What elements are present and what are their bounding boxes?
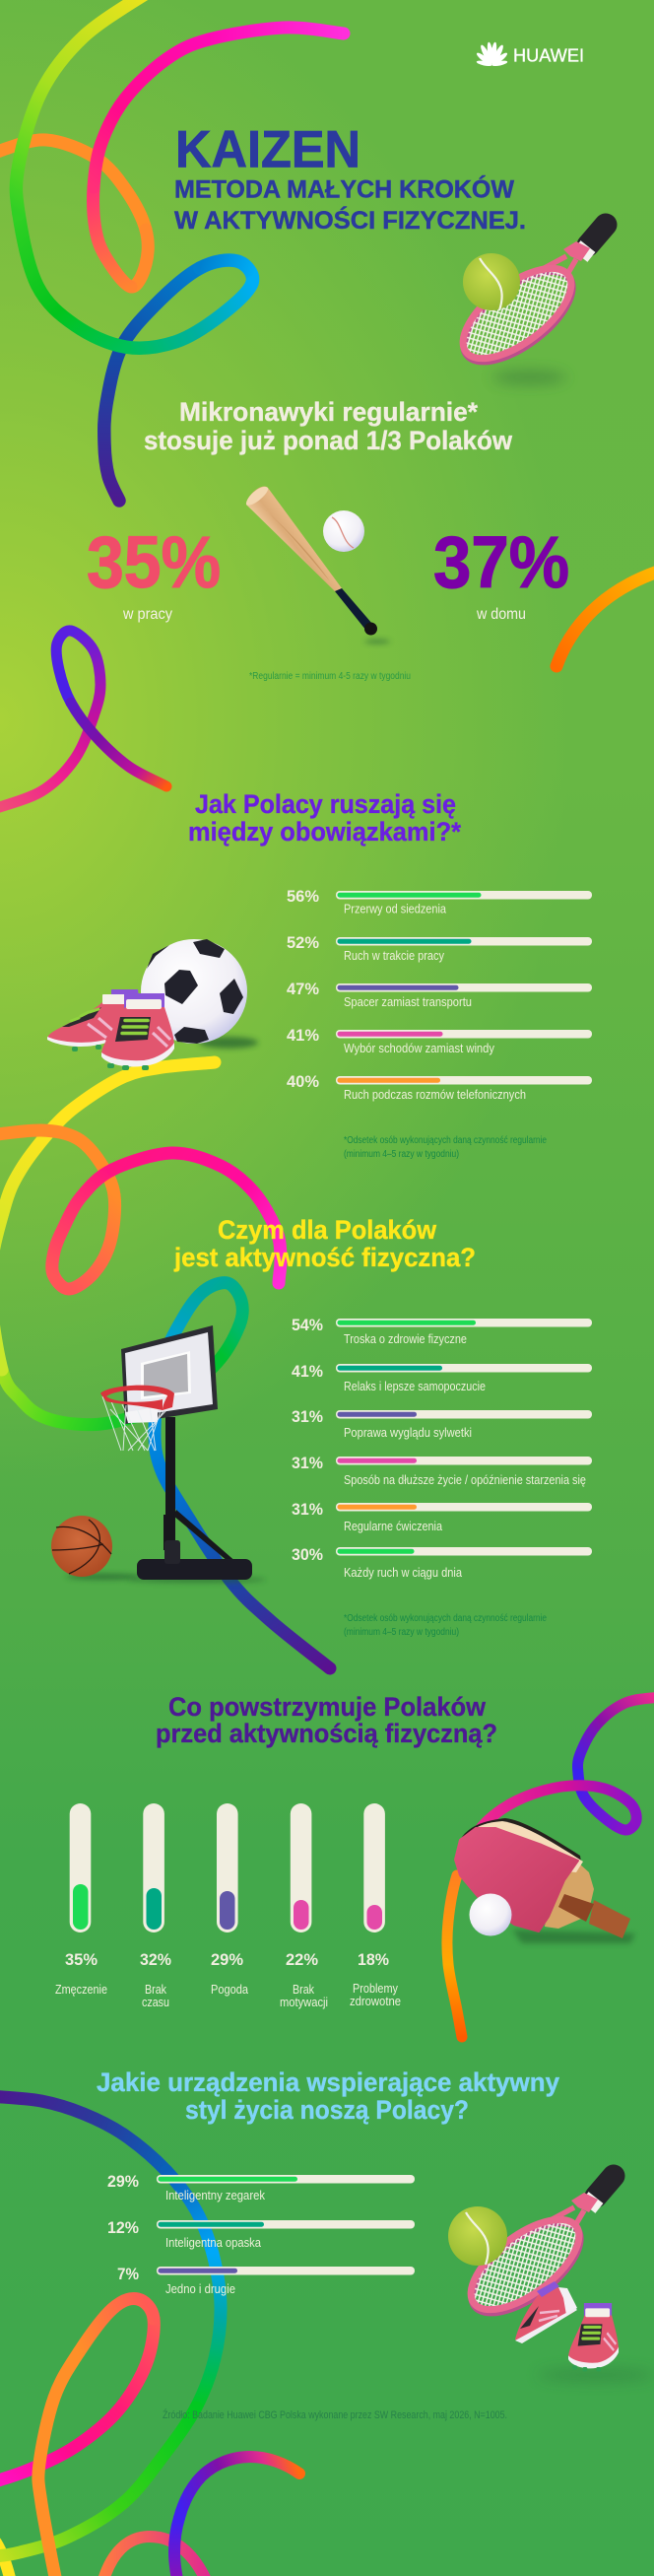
heading: devices: Jakie urządzenia wspierające aktywny <box>97 2068 559 2097</box>
row: 31 percent body shape: Poprawa wyglądu sylwetki <box>344 1426 472 1440</box>
row: 56 percent: 56% <box>287 888 319 906</box>
stat: 35 percent at work: w pracy <box>122 606 172 623</box>
chart: activity between duties <box>287 888 592 1102</box>
column: lack of time: Brak <box>145 1983 167 1997</box>
ribbon: top orange and magenta <box>0 28 344 287</box>
row: 31 percent longevity: 31% <box>292 1455 323 1472</box>
row: 12 percent: 12% <box>107 2219 139 2237</box>
footnote: share of respondents second: (minimum 4–5 razy w tygodniu) <box>344 1627 459 1638</box>
footnote: share of respondents: *Odsetek osób wykonujących daną czynność regularnie <box>344 1135 547 1146</box>
row: 54 percent <box>292 1317 592 1346</box>
title: KAIZEN <box>175 120 360 179</box>
column: fatigue <box>55 1803 107 1997</box>
column: health problems: Problemy <box>353 1982 399 1996</box>
heading: micro-habits: stosuje już ponad 1/3 Polaków <box>144 426 513 455</box>
footnote: share of respondents: (minimum 4–5 razy w tygodniu) <box>344 1149 459 1160</box>
row: 30 percent <box>292 1546 592 1580</box>
row: 41 percent: Relaks i lepsze samopoczucie <box>344 1380 486 1393</box>
icon: Huawei petals <box>476 41 508 67</box>
row: 31 percent exercise: 31% <box>292 1501 323 1519</box>
heading: devices: styl życia noszą Polacy? <box>185 2095 469 2125</box>
stat: 35 percent at work: 35% <box>87 521 221 603</box>
row: 40 percent <box>287 1073 592 1102</box>
ribbon: middle yellow, green and blue <box>0 1062 330 1668</box>
column: lack of time: 32% <box>140 1951 171 1969</box>
stat: 37 percent at home: w domu <box>476 606 526 623</box>
row: 52 percent <box>287 934 592 963</box>
row: 41 percent: 41% <box>292 1363 323 1381</box>
icon: tennis racket, ball and boots <box>448 2176 654 2382</box>
icon: baseball bat and ball <box>246 487 390 644</box>
title <box>174 120 526 235</box>
row: 7 percent <box>117 2266 415 2296</box>
column: lack of motivation <box>280 1803 328 2009</box>
row: 41 percent <box>292 1363 592 1393</box>
heading: what activity means: jest aktywność fizyczna? <box>173 1243 476 1272</box>
ribbon: right of paddle <box>447 1697 654 2037</box>
heading: what activity means: Czym dla Polaków <box>218 1215 437 1245</box>
title: W AKTYWNOŚCI FIZYCZNEJ. <box>174 205 526 235</box>
stat: 37 percent at home: 37% <box>433 521 569 603</box>
row: 41 percent <box>287 1027 592 1055</box>
icon: table tennis paddle and ball <box>455 1818 635 1943</box>
column: lack of motivation: motywacji <box>280 1996 328 2009</box>
column: weather: 29% <box>211 1951 243 1969</box>
heading: devices <box>97 2068 559 2125</box>
column: health problems <box>350 1803 401 2008</box>
row: 29 percent: Inteligentny zegarek <box>165 2189 266 2203</box>
row: 56 percent: Przerwy od siedzenia <box>344 903 446 916</box>
column: weather <box>211 1803 248 1997</box>
row: 31 percent exercise: Regularne ćwiczenia <box>344 1520 442 1533</box>
chart: devices <box>107 2173 415 2296</box>
row: 40 percent: 40% <box>287 1073 319 1091</box>
icon: soccer ball and boots <box>47 939 258 1070</box>
row: 54 percent: Troska o zdrowie fizyczne <box>344 1332 467 1346</box>
row: 7 percent: 7% <box>117 2266 139 2283</box>
row: 47 percent: 47% <box>287 981 319 998</box>
row: 30 percent: 30% <box>292 1546 323 1564</box>
ribbon: middle orange and magenta <box>0 1130 281 1289</box>
row: 12 percent: Inteligentna opaska <box>165 2236 261 2250</box>
row: 31 percent body shape: 31% <box>292 1408 323 1426</box>
column: lack of motivation: Brak <box>293 1983 315 1997</box>
row: 31 percent body shape <box>292 1408 592 1440</box>
row: 52 percent: Ruch w trakcie pracy <box>344 949 445 963</box>
column: health problems: 18% <box>358 1951 389 1969</box>
ribbon: right orange arc <box>556 572 654 666</box>
heading: what holds Poles back: Co powstrzymuje Polaków <box>168 1692 487 1722</box>
row: 31 percent longevity: Sposób na dłuższe życie / opóźnienie starzenia się <box>344 1473 586 1487</box>
row: 41 percent: Wybór schodów zamiast windy <box>344 1042 495 1055</box>
chart: barriers <box>55 1803 401 2009</box>
row: 56 percent <box>287 888 592 916</box>
column: weather: Pogoda <box>211 1983 248 1997</box>
column: lack of motivation: 22% <box>286 1951 318 1969</box>
heading: what holds Poles back <box>156 1692 497 1748</box>
row: 40 percent: Ruch podczas rozmów telefonicznych <box>344 1088 526 1102</box>
row: 12 percent <box>107 2219 415 2250</box>
row: 29 percent <box>107 2173 415 2203</box>
row: 52 percent: 52% <box>287 934 319 952</box>
footnote: share of respondents <box>344 1135 547 1160</box>
title: METODA MAŁYCH KROKÓW <box>174 173 514 203</box>
row: 31 percent longevity <box>292 1455 592 1487</box>
column: lack of time <box>140 1803 171 2009</box>
row: 31 percent exercise <box>292 1501 592 1533</box>
footnote: regularly: *Regularnie = minimum 4-5 razy w tygodniu <box>249 671 411 682</box>
row: 47 percent: Spacer zamiast transportu <box>344 995 472 1009</box>
row: 41 percent: 41% <box>287 1027 319 1045</box>
Huawei logo <box>476 41 584 67</box>
row: 54 percent: 54% <box>292 1317 323 1334</box>
column: fatigue: 35% <box>65 1951 98 1969</box>
footnote: share of respondents second <box>344 1613 547 1638</box>
row: 29 percent: 29% <box>107 2173 139 2191</box>
row: 7 percent: Jedno i drugie <box>165 2282 235 2296</box>
row: 47 percent <box>287 981 592 1009</box>
ribbon: top yellow, green and blue <box>16 0 253 501</box>
row: 30 percent: Każdy ruch w ciągu dnia <box>344 1566 462 1580</box>
column: health problems: zdrowotne <box>350 1995 401 2008</box>
heading: micro-habits: Mikronawyki regularnie* <box>179 397 478 427</box>
footnote: share of respondents second: *Odsetek osób wykonujących daną czynność regularnie <box>344 1613 547 1624</box>
source: Źródło: Badanie Huawei CBG Polska wykonane przez SW Research, maj 2026, N=1005. <box>163 2408 507 2421</box>
heading: what holds Poles back: przed aktywnością fizyczną? <box>156 1719 497 1748</box>
ribbons: bottom left <box>0 2096 299 2576</box>
icon: tennis racket and ball <box>448 225 606 384</box>
chart: what activity means <box>292 1317 592 1580</box>
heading: how Poles move: Jak Polacy ruszają się <box>195 789 456 819</box>
column: fatigue: Zmęczenie <box>55 1983 107 1997</box>
heading: how Poles move <box>188 789 461 847</box>
heading: micro-habits <box>144 397 513 455</box>
wordmark: HUAWEI <box>513 45 584 65</box>
ribbon: violet loop <box>0 631 166 810</box>
heading: what activity means <box>173 1215 476 1272</box>
column: lack of time: czasu <box>142 1996 169 2009</box>
heading: how Poles move: między obowiązkami?* <box>188 817 461 847</box>
icon: basketball hoop and ball <box>51 1325 266 1583</box>
